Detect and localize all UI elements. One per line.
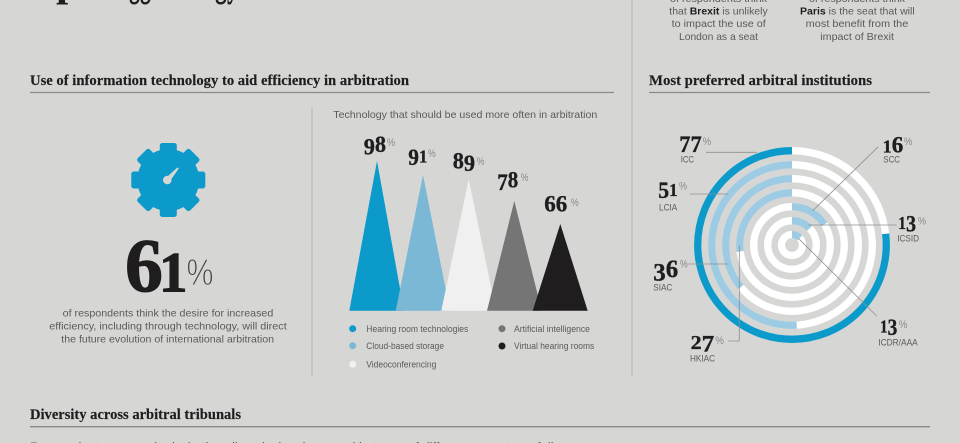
value: videoconferencing 89%: 8 xyxy=(453,148,464,174)
radial bars xyxy=(698,151,886,339)
efficiency description: the future evolution of international arbitration xyxy=(61,334,274,346)
callout: HKIAC 27%: HKIAC xyxy=(690,354,715,364)
callout: SIAC 36% xyxy=(653,256,728,293)
callout: SIAC 36%: SIAC xyxy=(653,283,673,293)
callout: ICSID 13%: 3 xyxy=(906,212,916,237)
heading: use of information technology: Use of information technology to aid efficiency in arbitration xyxy=(30,73,410,89)
callout: SIAC 36%: 3 xyxy=(653,260,666,287)
value: cloud-based storage 91%: 1 xyxy=(419,147,427,167)
callout: SCC 16%: 6 xyxy=(892,132,903,157)
callout: SCC 16% xyxy=(813,132,912,211)
icon: gear with gauge needle xyxy=(131,143,205,217)
legend xyxy=(349,324,595,370)
legend: Hearing room technologies xyxy=(366,324,469,334)
value: hearing room technologies 98%: 8 xyxy=(375,132,386,157)
value: artificial intelligence 78%: 8 xyxy=(508,168,518,192)
callout: HKIAC 27%: 7 xyxy=(702,332,714,357)
heading: most preferred arbitral institutions: Most preferred arbitral institutions xyxy=(649,73,872,89)
value: cloud-based storage 91%: % xyxy=(428,148,436,160)
Brexit statistic: Paris as a seat: Paris is the seat that will xyxy=(800,6,915,18)
value: videoconferencing 89%: 9 xyxy=(464,151,475,176)
callout: SCC 16%: % xyxy=(904,136,912,148)
callout: LCIA 51%: % xyxy=(679,181,687,193)
value: virtual hearing rooms 66%: 66 xyxy=(544,192,567,217)
clipped main heading fragments xyxy=(56,0,239,5)
Brexit statistic: use of London as a seat xyxy=(669,0,768,43)
value: hearing room technologies 98% xyxy=(364,132,395,160)
Brexit statistic: use of London as a seat: London as a seat xyxy=(679,31,758,43)
panel: technology chart xyxy=(333,109,597,370)
callout: SCC 16%: 1 xyxy=(883,136,892,156)
callout: ICC 77%: % xyxy=(703,136,711,148)
callout: ICDR/AAA 13%: % xyxy=(899,319,907,331)
callout: ICC 77%: ICC xyxy=(681,155,694,165)
callout: HKIAC 27% xyxy=(690,245,739,364)
value: cloud-based storage 91% xyxy=(408,145,436,170)
value: artificial intelligence 78%: 7 xyxy=(497,170,508,195)
callout: HKIAC 27%: % xyxy=(715,335,724,347)
callout: ICSID 13%: 1 xyxy=(898,213,906,233)
heading: diversity across arbitral tribunals: Diversity across arbitral tribunals xyxy=(30,407,241,423)
value: videoconferencing 89%: % xyxy=(477,156,485,168)
callout: LCIA 51%: 5 xyxy=(658,178,669,203)
Brexit statistic: use of London as a seat: that Brexit is unlikely xyxy=(669,6,768,18)
value: cloud-based storage 91%: 9 xyxy=(408,145,419,170)
callout: HKIAC 27%: 2 xyxy=(691,332,702,354)
callout: ICSID 13%: % xyxy=(918,216,926,228)
callout: ICDR/AAA 13%: 3 xyxy=(888,315,897,340)
callout: SCC 16%: SCC xyxy=(883,155,900,165)
value: virtual hearing rooms 66%: % xyxy=(571,197,579,209)
callout: LCIA 51% xyxy=(658,178,728,213)
efficiency description: of respondents think the desire for increased xyxy=(63,308,273,320)
legend: Artificial intelligence xyxy=(514,324,590,334)
callout: LCIA 51%: LCIA xyxy=(659,203,677,213)
triangle chart xyxy=(349,161,588,311)
efficiency description xyxy=(49,308,287,346)
callout: SIAC 36%: 6 xyxy=(666,256,678,283)
big number 61%: % xyxy=(186,252,214,293)
value: videoconferencing 89% xyxy=(453,148,485,176)
panel: arbitral institutions radial chart xyxy=(653,132,926,364)
panel: efficiency statistic xyxy=(49,143,287,346)
callout: ICC 77%: 77 xyxy=(679,132,702,157)
callout: ICDR/AAA 13% xyxy=(798,238,918,348)
callout: ICDR/AAA 13%: ICDR/AAA xyxy=(878,338,918,348)
value: hearing room technologies 98%: % xyxy=(387,137,395,149)
efficiency description: efficiency, including through technology, will direct xyxy=(49,320,287,332)
callout: ICDR/AAA 13%: 1 xyxy=(880,316,888,336)
value: artificial intelligence 78%: % xyxy=(521,172,529,184)
callout: LCIA 51%: 1 xyxy=(669,180,678,200)
value: hearing room technologies 98%: 9 xyxy=(364,134,375,160)
big number 61%: 61 xyxy=(125,224,188,308)
callout: ICSID 13% xyxy=(808,212,926,244)
legend: Cloud-based storage xyxy=(366,341,444,351)
callout: SIAC 36%: % xyxy=(680,258,688,270)
Brexit statistic: Paris as a seat: most benefit from the xyxy=(806,18,908,30)
legend: Virtual hearing rooms xyxy=(514,341,595,351)
Brexit statistic: use of London as a seat: to impact the use of xyxy=(672,18,766,30)
value: artificial intelligence 78% xyxy=(497,168,529,195)
callout: ICC 77% xyxy=(679,132,757,165)
Brexit statistic: Paris as a seat xyxy=(800,0,915,43)
Brexit statistic: Paris as a seat: impact of Brexit xyxy=(820,31,894,43)
value: virtual hearing rooms 66% xyxy=(544,192,579,217)
callout: ICSID 13%: ICSID xyxy=(897,234,919,244)
chart subtitle: Technology that should be used more often in arbitration xyxy=(333,109,597,121)
legend: Videoconferencing xyxy=(366,360,436,370)
